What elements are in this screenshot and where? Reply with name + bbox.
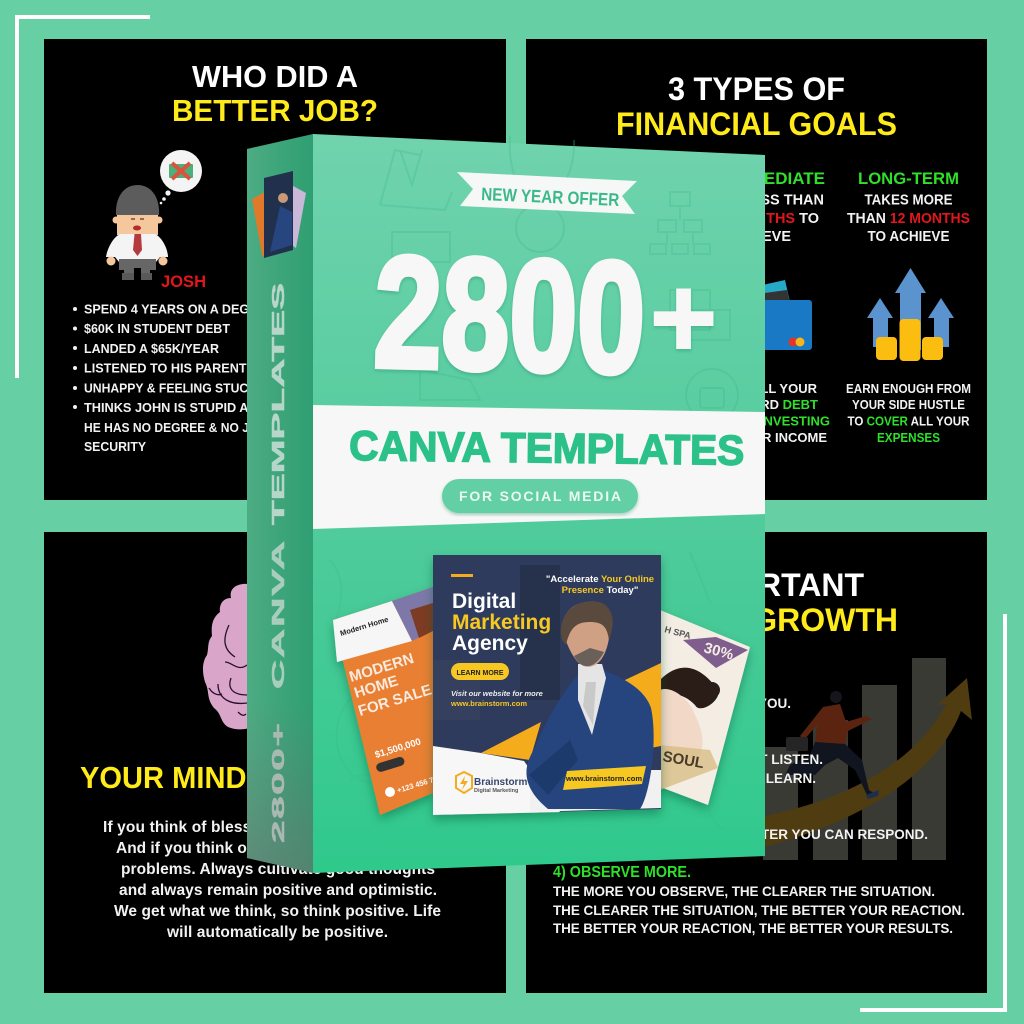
heading: who did a better job [172, 59, 378, 128]
template card: digital marketing agency: www.brainstorm.com [565, 774, 642, 783]
paragraph: positive thinking: If you think of blessings, you get more blessings. [103, 819, 473, 836]
column: intermediate goals: 6-12 MONTHS TO [699, 211, 819, 227]
bullet list: SECURITY [84, 439, 146, 454]
template card: digital marketing agency: Digital [452, 590, 516, 613]
column: intermediate goals: PAY OFF ALL YOUR [694, 381, 818, 396]
panel: 3 types of financial goals [526, 39, 987, 500]
paragraph: positive thinking: We get what we think, so think positive. Life [114, 903, 441, 920]
paragraph: positive thinking: will automatically be positive. [166, 924, 388, 941]
ribbon: new year offer [457, 172, 637, 214]
template card: digital marketing agency: www.brainstorm.com [450, 699, 527, 708]
corner frame: bottom right [860, 614, 1005, 1010]
tips list: THE FASTER YOU CAN RESPOND. [704, 827, 928, 842]
column: intermediate goals: OR START INVESTING [691, 414, 830, 428]
template card: spa: H SPA [663, 624, 692, 641]
heading: 3 types of financial goals [616, 71, 897, 142]
column: long-term goals: TO ACHIEVE [868, 229, 950, 245]
tip 4: observe more: THE MORE YOU OBSERVE, THE CLEARER THE SITUATION. [553, 884, 935, 899]
column: long-term goals: TAKES MORE [864, 192, 953, 208]
box side face [247, 134, 313, 873]
product box [247, 134, 765, 873]
tips list: LISTEN TO LEARN. [692, 771, 816, 786]
heading: who did a better job: WHO DID A [192, 59, 358, 94]
icon: running businessman [785, 691, 879, 799]
template card: real estate: HOME [352, 672, 400, 702]
box front face [313, 134, 765, 873]
icon: growth arrows and coins [867, 268, 954, 361]
heading: who did a better job: BETTER JOB? [172, 93, 378, 128]
template card: spa: SOUL [661, 748, 705, 772]
panel: important keys to growth [526, 532, 987, 993]
bullet list: LANDED A $65K/YEAR [84, 341, 220, 356]
heading: 3 types of financial goals: 3 TYPES OF [668, 71, 845, 107]
icon: mini template stack [252, 171, 306, 258]
pill: for social media: FOR SOCIAL MEDIA [459, 488, 621, 504]
paragraph: positive thinking: And if you think of problems, you get more [116, 840, 432, 857]
bullet list: $60K IN STUDENT DEBT [84, 321, 230, 336]
side label: TEMPLATES [268, 283, 288, 525]
side label: 2800+ [268, 721, 288, 843]
bullet list: UNHAPPY & FEELING STUCK [84, 380, 258, 396]
column: long-term goals: LONG-TERM [858, 169, 959, 188]
heading: your mindset: YOUR MIND CREATES YOUR [80, 760, 483, 795]
bullet list [73, 302, 275, 454]
heading: 3 types of financial goals: FINANCIAL GOALS [616, 106, 897, 142]
template card: digital marketing agency: Brainstorm [474, 777, 527, 788]
paragraph: positive thinking: problems. Always cultivate good thoughts [121, 861, 435, 878]
template card: digital marketing agency: Digital Marketing [474, 788, 518, 794]
tip 4: observe more: THE CLEARER THE SITUATION, THE BETTER YOUR REACTION. [553, 903, 965, 918]
template card: spa [655, 610, 750, 805]
column: intermediate goals: ACHIEVE [727, 229, 791, 245]
corner frame: top left [17, 17, 150, 378]
paragraph: positive thinking: and always remain positive and optimistic. [119, 882, 437, 899]
icon: josh character with thought bubble [106, 150, 202, 280]
panel: who did a better job [44, 39, 506, 500]
template card: digital marketing agency: Agency [452, 632, 528, 655]
column: long-term goals: THAN 12 MONTHS [847, 211, 970, 227]
pill: for social media [442, 479, 638, 513]
bullet list: HE HAS NO DEGREE & NO JOB [84, 420, 267, 435]
text: long-term caption [846, 381, 971, 445]
bullet list: THINKS JOHN IS STUPID AS [84, 400, 257, 415]
template card: real estate: FOR SALE [356, 681, 434, 720]
photo: businessman [526, 601, 654, 809]
template card: real estate: Modern Home [339, 615, 389, 638]
headline number: 2800+: 2800 [372, 223, 647, 406]
column: intermediate goals: INTERMEDIATE [699, 169, 825, 188]
column: intermediate goals: TAKES LESS THAN [690, 192, 824, 208]
template card: digital marketing agency: LEARN MORE [456, 670, 504, 677]
heading: canva templates: CANVA TEMPLATES [349, 422, 745, 474]
text: long-term caption: EARN ENOUGH FROM [846, 381, 971, 396]
text: long-term caption: YOUR SIDE HUSTLE [852, 397, 965, 412]
icon: credit card [730, 280, 812, 350]
heading: important keys to growth [603, 567, 898, 638]
paragraph: positive thinking [103, 819, 473, 941]
icon: brain [203, 584, 250, 729]
tip 4: observe more: THE BETTER YOUR REACTION, THE BETTER YOUR RESULTS. [553, 921, 953, 936]
column: intermediate goals [683, 169, 830, 445]
bullet list: LISTENED TO HIS PARENTS [84, 360, 255, 376]
template card: digital marketing agency: Marketing [452, 611, 551, 634]
template card: digital marketing agency: "Accelerate Your Online [546, 574, 654, 585]
template card: real estate [333, 587, 439, 815]
text: long-term caption: TO COVER ALL YOUR [848, 414, 970, 428]
tips list: DON'T JUST LISTEN. [688, 752, 823, 767]
template card: real estate: +123 456 78 [396, 774, 439, 795]
template card: digital marketing agency: Visit our website for more [451, 689, 543, 698]
faint background icons [330, 136, 738, 830]
tips list: LISTEN BEFORE YOU. [646, 696, 791, 711]
panel: your mindset [44, 532, 506, 993]
bullet list: SPEND 4 YEARS ON A DEGREE [84, 302, 275, 316]
template card: digital marketing agency [433, 555, 661, 815]
column: intermediate goals: 10% OF YOUR INCOME [683, 430, 827, 445]
side label [268, 283, 288, 843]
column: long-term goals [847, 169, 970, 245]
label: josh: JOSH [161, 272, 206, 291]
column: intermediate goals: CREDIT CARD DEBT [689, 397, 818, 412]
text: long-term caption: EXPENSES [877, 430, 940, 445]
template card: real estate: MODERN [347, 650, 416, 686]
arrow: rising growth curve [760, 678, 972, 848]
white band [313, 405, 765, 529]
bar chart backdrop [763, 658, 946, 860]
tips list [646, 696, 928, 842]
heading: important keys to growth: IMPORTANT [676, 567, 864, 603]
template card: spa: 30% [702, 639, 735, 664]
heading: important keys to growth: KEYS TO GROWTH [603, 602, 898, 638]
tip 4: observe more: 4) OBSERVE MORE. [553, 864, 691, 881]
template card: real estate: $1,500,000 [374, 736, 422, 761]
side label: CANVA [268, 539, 288, 689]
template card: digital marketing agency: Presence Today" [562, 585, 638, 596]
ribbon: new year offer: NEW YEAR OFFER [481, 184, 620, 210]
headline number: 2800+: + [650, 254, 717, 382]
tip 4: observe more [553, 864, 965, 936]
